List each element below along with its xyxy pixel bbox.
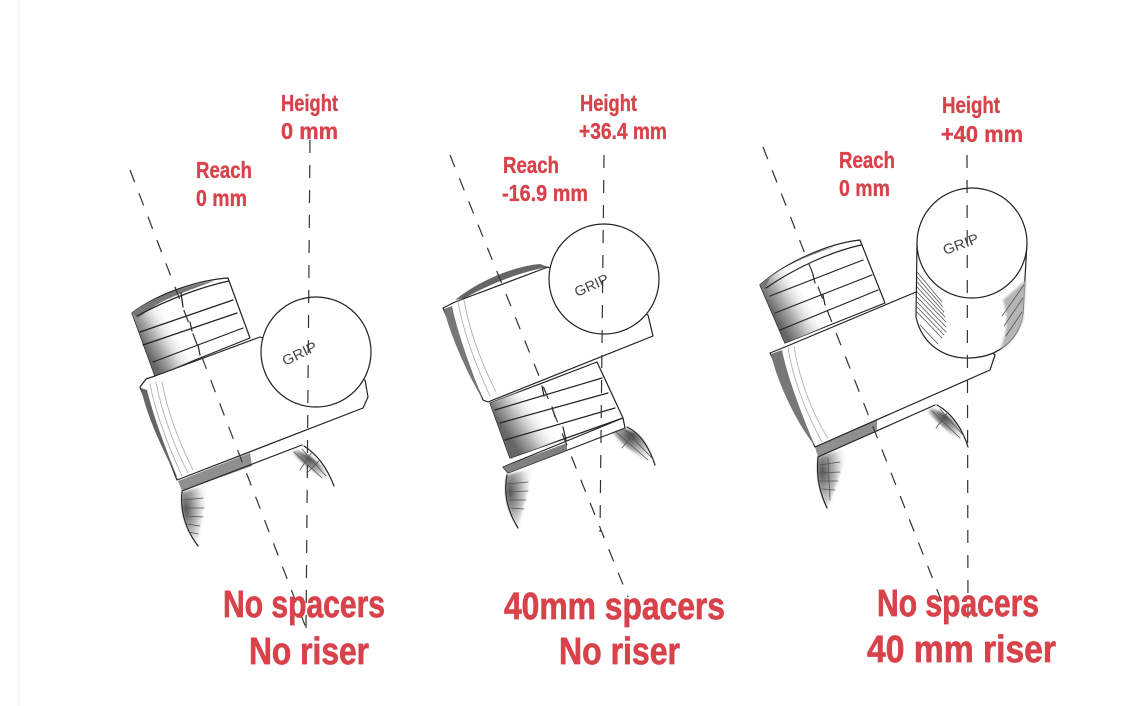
fork crown [182,446,334,546]
reach label: Reach [503,152,559,178]
grip circle [261,297,371,407]
axis lines [763,147,968,620]
panel: no spacers 40 mm riser [760,92,1056,671]
headset lip [815,405,935,457]
caption: 40mm spacers [504,586,725,628]
spacer stack [490,362,623,458]
riser cylinder [916,243,1027,358]
height label: 0 mm [281,118,338,144]
grip label: GRIP [572,270,611,300]
caption: No riser [249,631,369,673]
axis lines [450,155,628,597]
caption: No spacers [877,583,1039,625]
reach label: 0 mm [839,175,890,201]
height label: Height [942,92,1000,118]
grip label: GRIP [279,338,320,369]
axis lines [130,140,310,632]
stem body [770,292,995,447]
panel: no spacers no riser [130,90,385,673]
reach label [196,157,252,211]
reach label: Reach [196,157,252,183]
height label: +36.4 mm [579,118,667,144]
grip label: GRIP [941,230,981,258]
caption [223,584,385,673]
headset lip [178,445,302,491]
caption: No riser [559,631,680,673]
spacer stack [760,240,885,343]
reach label: -16.9 mm [502,180,588,206]
height label [941,92,1023,147]
caption: 40 mm riser [867,629,1056,671]
headset lip [503,418,625,473]
grip circle [549,224,659,334]
reach label [839,147,895,201]
height label: +40 mm [941,121,1023,147]
panel: 40mm spacers no riser [443,90,725,673]
fork crown [817,405,968,508]
reach label: 0 mm [196,185,247,211]
stem body [443,264,653,402]
caption [867,583,1056,671]
reach label: Reach [839,147,895,173]
height label [579,90,667,144]
caption [504,586,725,673]
height label: Height [580,90,637,116]
height label [281,90,338,144]
spacer stack [132,278,250,376]
grip circle [917,188,1027,298]
caption: No spacers [223,584,385,626]
fork crown [506,427,656,528]
stem body [140,337,368,480]
height label: Height [281,90,338,116]
reach label [502,152,588,206]
